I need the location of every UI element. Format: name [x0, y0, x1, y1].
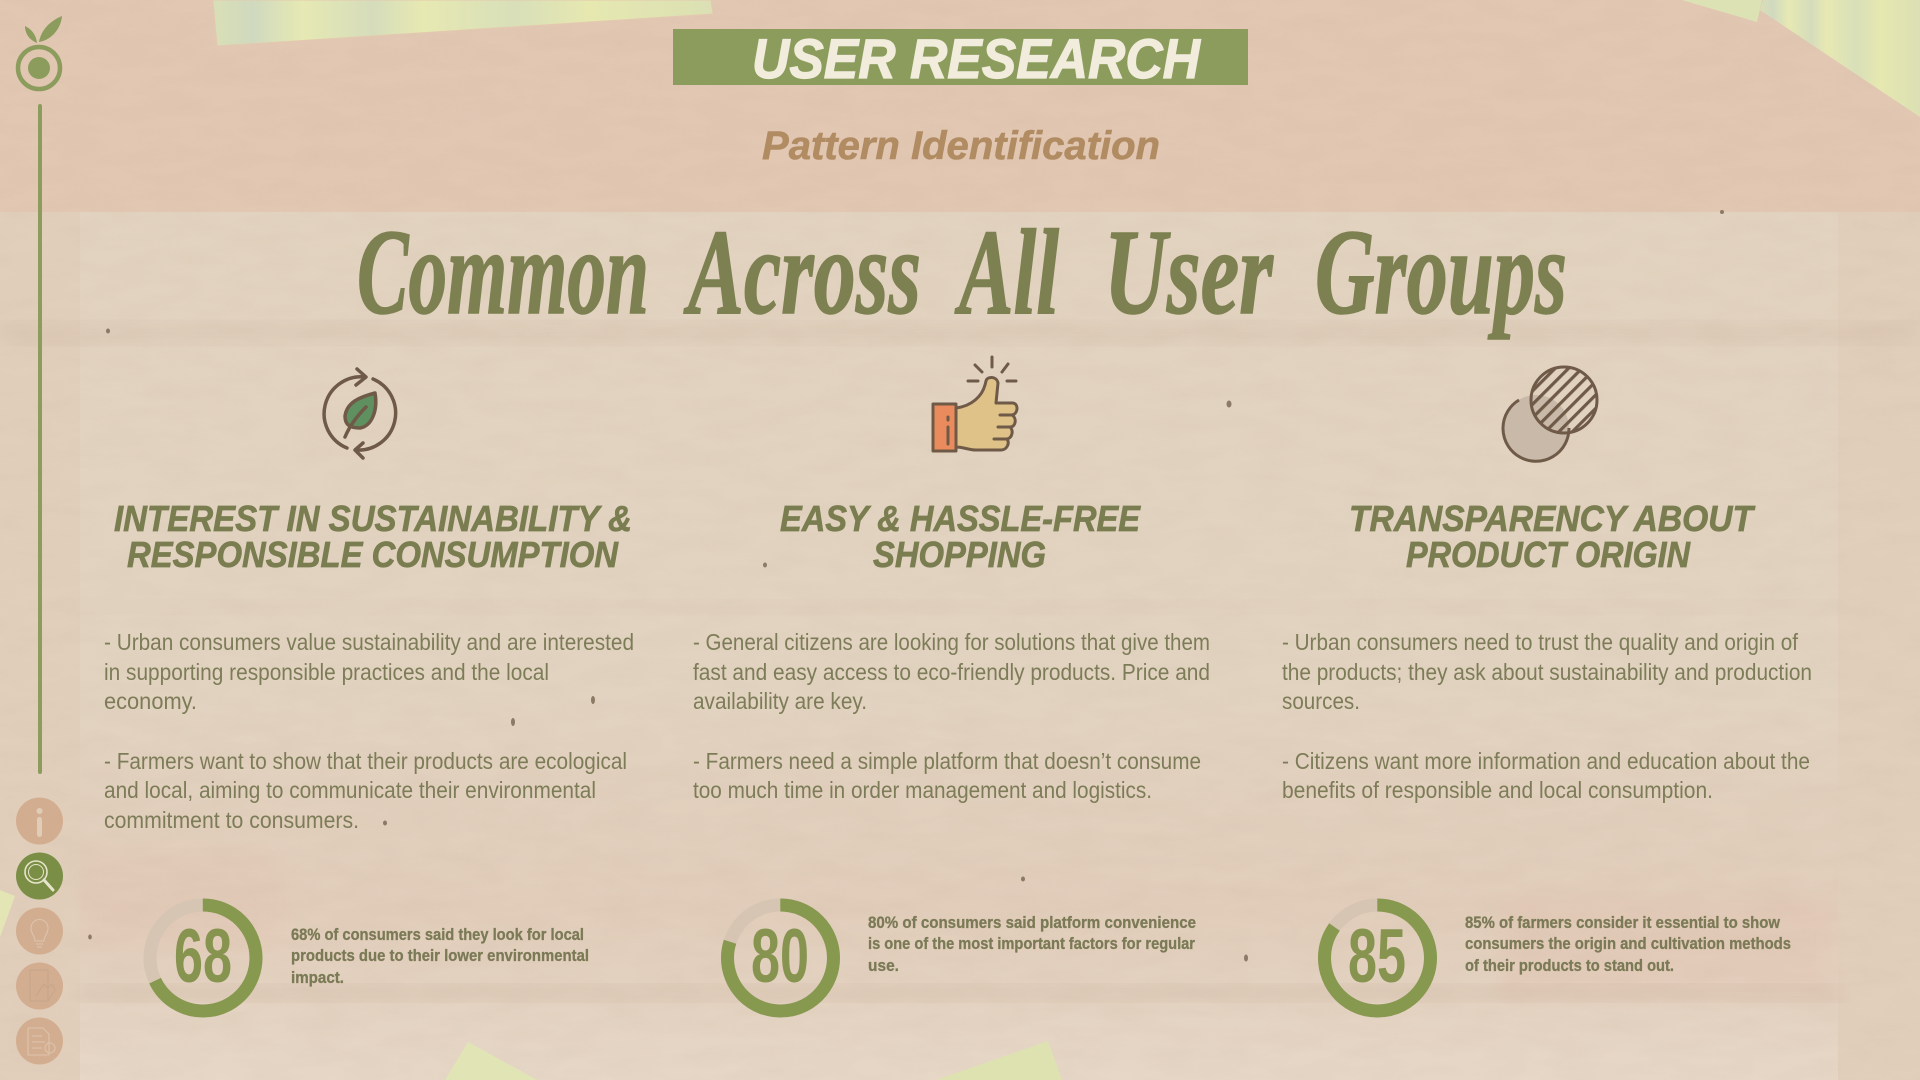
stat text: 80 percent: 80% of consumers said platform convenience [868, 914, 1196, 932]
column 2 heading: EASY & HASSLE-FREE [780, 498, 1141, 539]
column 3 body text [1282, 629, 1812, 803]
column 1 body text: economy. [104, 688, 197, 714]
column 2 body text: availability are key. [693, 688, 867, 714]
stat text: 80 percent: use. [868, 957, 899, 975]
stat text: 68 percent [291, 926, 589, 987]
paper scrap: bottom left [445, 1042, 537, 1080]
column 1 heading: INTEREST IN SUSTAINABILITY & [114, 498, 632, 539]
icon: thumbs up [933, 357, 1017, 451]
donut: 80 percent [728, 905, 834, 1011]
main heading: All [954, 205, 1059, 340]
column 3 heading [1349, 498, 1756, 575]
column 2 body text [693, 629, 1210, 803]
donut: 68 percent [150, 905, 256, 1011]
stat text: 85 percent: consumers the origin and cultivation methods [1465, 935, 1791, 953]
column 2 heading: SHOPPING [873, 534, 1046, 575]
column 3 body text: benefits of responsible and local consumption. [1282, 777, 1713, 803]
icon: overlapping circles [1503, 367, 1597, 461]
stat text: 68 percent: products due to their lower environmental [291, 947, 589, 965]
column 3 body text: the products; they ask about sustainability and production [1282, 659, 1812, 685]
column 1 body text: and local, aiming to communicate their environmental [104, 777, 596, 803]
donut: 68 percent: 68 [174, 914, 232, 999]
column 3 body text: - Citizens want more information and education about the [1282, 748, 1810, 774]
nav: search active [16, 852, 63, 900]
column 1 body text: - Urban consumers value sustainability and are interested [104, 629, 634, 655]
stat text: 80 percent [868, 914, 1196, 975]
logo: leaf and ring [18, 16, 62, 89]
donut: 85 percent: 85 [1348, 914, 1406, 999]
column 1 heading: RESPONSIBLE CONSUMPTION [127, 534, 619, 575]
column 2 heading [780, 498, 1141, 575]
column 1 heading [114, 498, 632, 575]
stat text: 68 percent: impact. [291, 969, 344, 987]
nav: document [16, 1018, 63, 1064]
stat text: 85 percent [1465, 914, 1791, 975]
column 3 heading: TRANSPARENCY ABOUT [1349, 498, 1756, 539]
column 3 body text: sources. [1282, 688, 1360, 714]
nav: phone touch [16, 962, 63, 1010]
column 3 heading: PRODUCT ORIGIN [1406, 534, 1691, 575]
stat text: 85 percent: 85% of farmers consider it essential to show [1465, 914, 1780, 932]
nav: idea bulb [16, 908, 63, 954]
column 2 body text: too much time in order management and logistics. [693, 777, 1152, 803]
column 2 body text: fast and easy access to eco-friendly products. Price and [693, 659, 1210, 685]
stat text: 80 percent: is one of the most important factors for regular [868, 935, 1196, 953]
main heading: Across [683, 205, 921, 340]
nav: info [16, 798, 63, 844]
main heading: User [1104, 205, 1274, 340]
title banner: USER RESEARCH [752, 27, 1201, 90]
column 3 body text: - Urban consumers need to trust the quality and origin of [1282, 629, 1799, 655]
column 1 body text: - Farmers want to show that their products are ecological [104, 748, 627, 774]
sidebar navigation [16, 798, 63, 1064]
main heading [357, 205, 1567, 340]
column 1 body text [104, 629, 634, 833]
donut: 85 percent [1324, 905, 1430, 1011]
donut: 80 percent: 80 [751, 914, 809, 999]
main heading: Groups [1315, 205, 1567, 340]
progress line [38, 104, 42, 774]
paper scrap: bottom right [936, 1041, 1062, 1080]
column 1 body text: in supporting responsible practices and the local [104, 659, 549, 685]
paper scrap: left edge [0, 890, 15, 937]
icon: recycle leaf [324, 369, 396, 458]
paper scrap: top right small [1682, 0, 1762, 22]
stat text: 68 percent: 68% of consumers said they look for local [291, 926, 584, 944]
column 2 body text: - Farmers need a simple platform that doesn’t consume [693, 748, 1201, 774]
main heading: Common [357, 205, 649, 340]
subtitle: Pattern Identification [762, 124, 1160, 168]
column 1 body text: commitment to consumers. [104, 807, 359, 833]
paper scrap: top right large [1760, 0, 1920, 117]
paper scrap: top left [213, 0, 713, 46]
column 2 body text: - General citizens are looking for solutions that give them [693, 629, 1210, 655]
stat text: 85 percent: of their products to stand out. [1465, 957, 1674, 975]
